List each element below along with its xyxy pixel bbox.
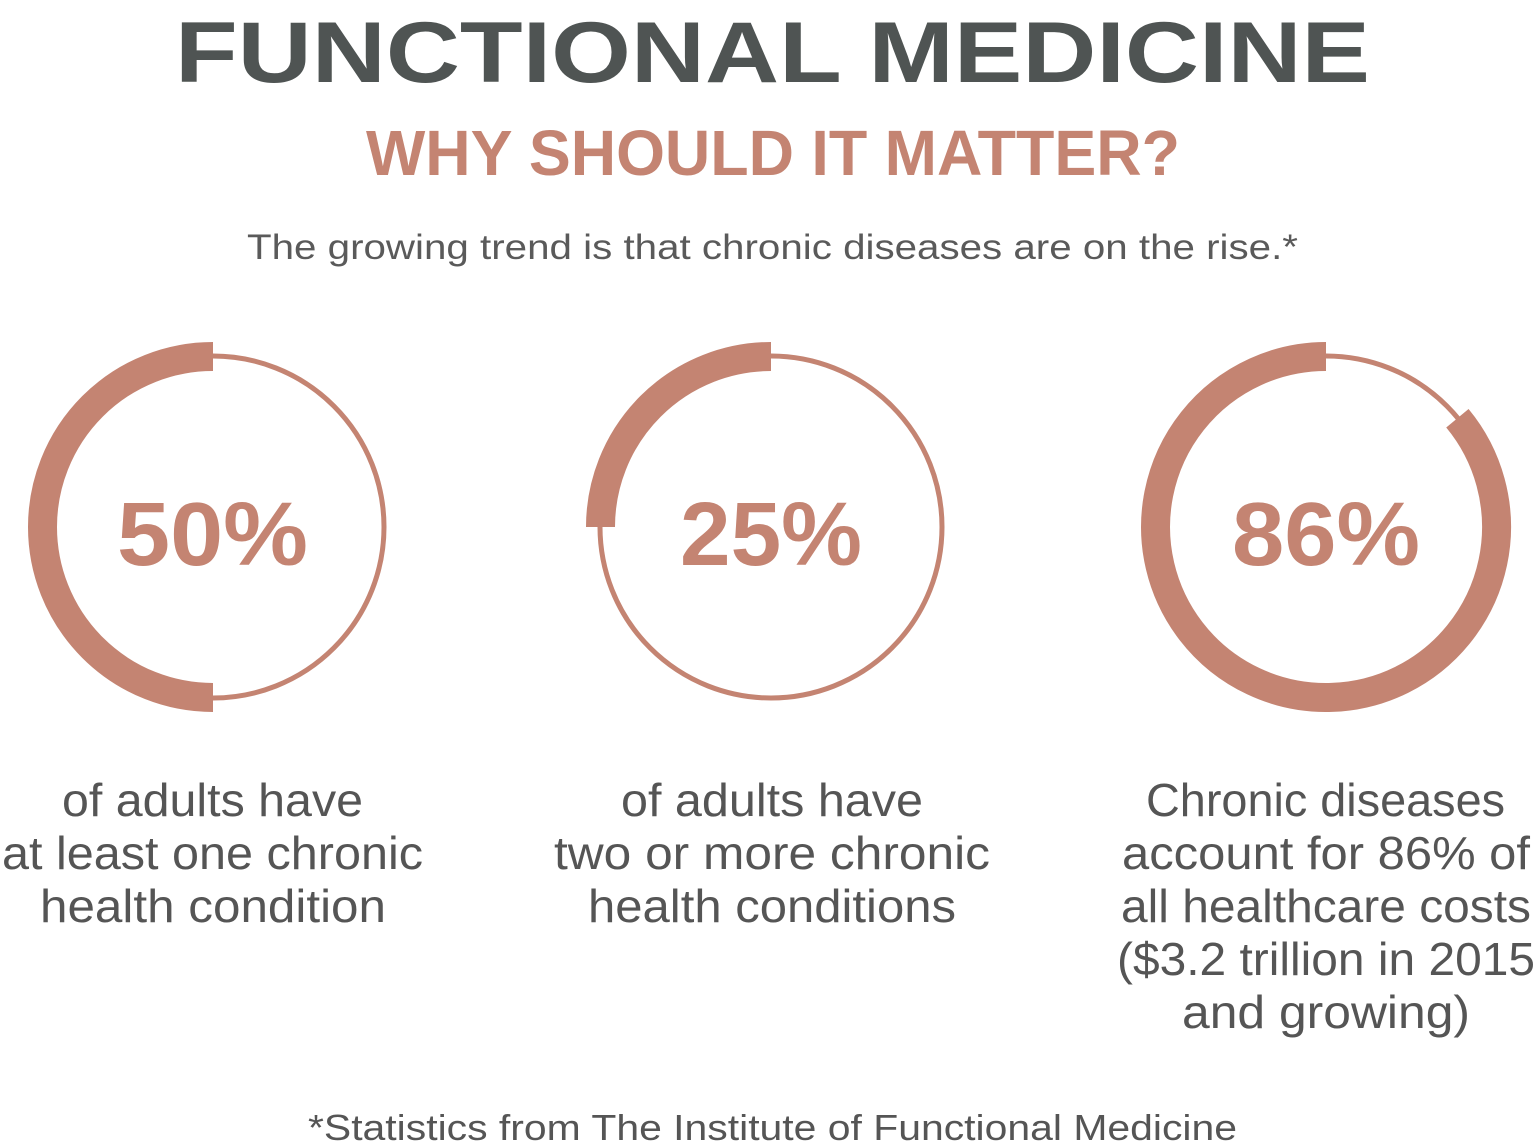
panel: 50% stat [2, 356, 423, 932]
description 2: of adults have [621, 774, 923, 826]
description 2: health conditions [588, 880, 956, 932]
description 2: two or more chronic [554, 827, 990, 879]
ring 1 [42, 356, 384, 698]
panel: 25% stat [554, 356, 990, 932]
description 3: Chronic diseases [1146, 774, 1505, 826]
description 2 [554, 774, 990, 932]
description 1: of adults have [62, 774, 363, 826]
number 50%: 50% [117, 485, 308, 585]
description 3: and growing) [1182, 986, 1470, 1038]
ring 2 [600, 356, 942, 698]
tagline: The growing trend is that chronic diseases are on the rise.* [247, 228, 1298, 267]
description 3 [1117, 774, 1535, 1038]
description 3: account for 86% of [1122, 827, 1530, 879]
description 1: health condition [40, 880, 386, 932]
number 86%: 86% [1232, 485, 1420, 585]
number 25%: 25% [680, 485, 862, 585]
description 3: all healthcare costs [1121, 880, 1531, 932]
description 1: at least one chronic [2, 827, 423, 879]
title: FUNCTIONAL MEDICINE [175, 5, 1370, 101]
ring 3 [1155, 356, 1497, 698]
description 3: ($3.2 trillion in 2015 [1117, 933, 1535, 985]
panel: 86% stat [1117, 356, 1535, 1038]
description 1 [2, 774, 423, 932]
footer source note: *Statistics from The Institute of Functional Medicine [308, 1107, 1237, 1147]
subtitle: WHY SHOULD IT MATTER? [366, 117, 1180, 189]
